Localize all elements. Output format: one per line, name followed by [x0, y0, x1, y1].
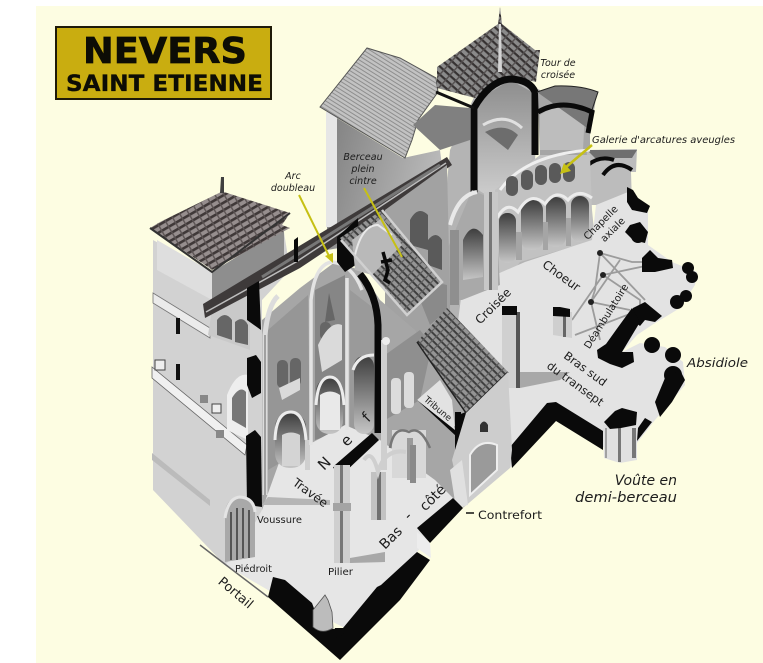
label: voûte en demi-berceau	[575, 473, 677, 506]
label: bas-côté: Bas	[377, 524, 406, 553]
apse half-dome	[537, 86, 637, 205]
choir piers	[502, 306, 572, 388]
choir and transept floor	[455, 192, 697, 468]
label: déambulatoire: Déambulatoire	[582, 282, 631, 351]
portal	[200, 497, 268, 597]
leader line: arc doubleau	[299, 195, 333, 263]
label: arc doubleau: doubleau	[271, 183, 315, 194]
cutaway church illustration	[150, 7, 698, 660]
nave main rib	[311, 262, 362, 445]
label: nef: f	[358, 409, 375, 426]
label: chapelle axiale: Chapelle	[582, 204, 621, 243]
label: voûte en demi-berceau: demi-berceau	[575, 490, 677, 506]
label: tour de croisée: Tour de	[540, 58, 576, 69]
ambulatory rib hubs	[588, 250, 606, 305]
label: voussure: Voussure	[257, 515, 302, 526]
upper nave wall beyond cut	[385, 165, 450, 342]
aisle roof	[417, 308, 508, 413]
right aisle buttress wall	[450, 372, 512, 508]
label: croisée: Croisée	[472, 285, 514, 327]
black bottom walls	[268, 498, 463, 660]
label: arc doubleau	[271, 171, 315, 194]
piers	[262, 445, 416, 563]
label: berceau plein cintre: cintre	[349, 176, 377, 187]
label: galerie d'arcatures aveugles: Galerie d'arcatures aveugles	[592, 135, 735, 146]
label: voûte en demi-berceau: Voûte en	[615, 473, 677, 489]
label: bas-côté: côté	[417, 482, 450, 515]
label: pilier: Pilier	[328, 567, 353, 578]
label: nef	[314, 409, 375, 474]
label: bas-côté: -	[401, 509, 416, 524]
label: berceau plein cintre: plein	[350, 164, 375, 175]
arcades	[275, 356, 374, 468]
label: contrefort: Contrefort	[478, 508, 543, 522]
label: arc doubleau: Arc	[284, 171, 302, 182]
label: nef: N	[314, 453, 335, 474]
half-barrel vault column	[603, 408, 637, 463]
label: travée: Travée	[289, 475, 331, 510]
left tower	[152, 228, 290, 570]
title plate	[56, 27, 271, 99]
barrel vault cut roof	[340, 210, 442, 315]
black chapel walls	[597, 187, 698, 441]
label: absidiole: Absidiole	[686, 356, 748, 370]
title plate: SAINT ETIENNE	[66, 72, 263, 97]
label: tour de croisée	[540, 58, 576, 81]
title plate: NEVERS	[83, 31, 247, 72]
tribune bay	[417, 380, 458, 455]
long nave roof	[203, 157, 452, 318]
label: bras sud du transept: du transept	[544, 358, 607, 409]
leader line: berceau plein cintre	[364, 188, 402, 257]
label: portail: Portail	[215, 574, 256, 612]
label: piédroit: Piédroit	[235, 564, 272, 575]
leader line: galerie	[560, 145, 592, 174]
baptismal statue	[313, 595, 333, 631]
left tower pyramid roof	[150, 177, 290, 272]
label: tribune: Tribune	[421, 394, 454, 424]
label: berceau plein cintre	[343, 152, 383, 187]
transept south wall	[510, 402, 603, 468]
transept roof and wall	[320, 48, 450, 250]
label: nef: e	[337, 431, 356, 450]
nave floor	[225, 425, 460, 628]
label: choeur: Choeur	[540, 257, 583, 294]
label: bras sud du transept: Bras sud	[561, 348, 610, 389]
aisle bays	[392, 430, 426, 478]
ambulatory vault ribs	[572, 253, 655, 340]
nave interior	[225, 262, 468, 628]
choir arcades and gallery	[495, 150, 595, 290]
label: tour de croisée: croisée	[541, 70, 575, 81]
contrefort tick	[466, 512, 474, 514]
crossing tower	[413, 7, 590, 340]
label: chapelle axiale: axiale	[599, 216, 628, 245]
transept crossing arches	[445, 190, 500, 305]
label: bas-côté	[377, 482, 450, 553]
cut black wall sections	[246, 218, 466, 507]
label: berceau plein cintre: Berceau	[343, 152, 383, 163]
